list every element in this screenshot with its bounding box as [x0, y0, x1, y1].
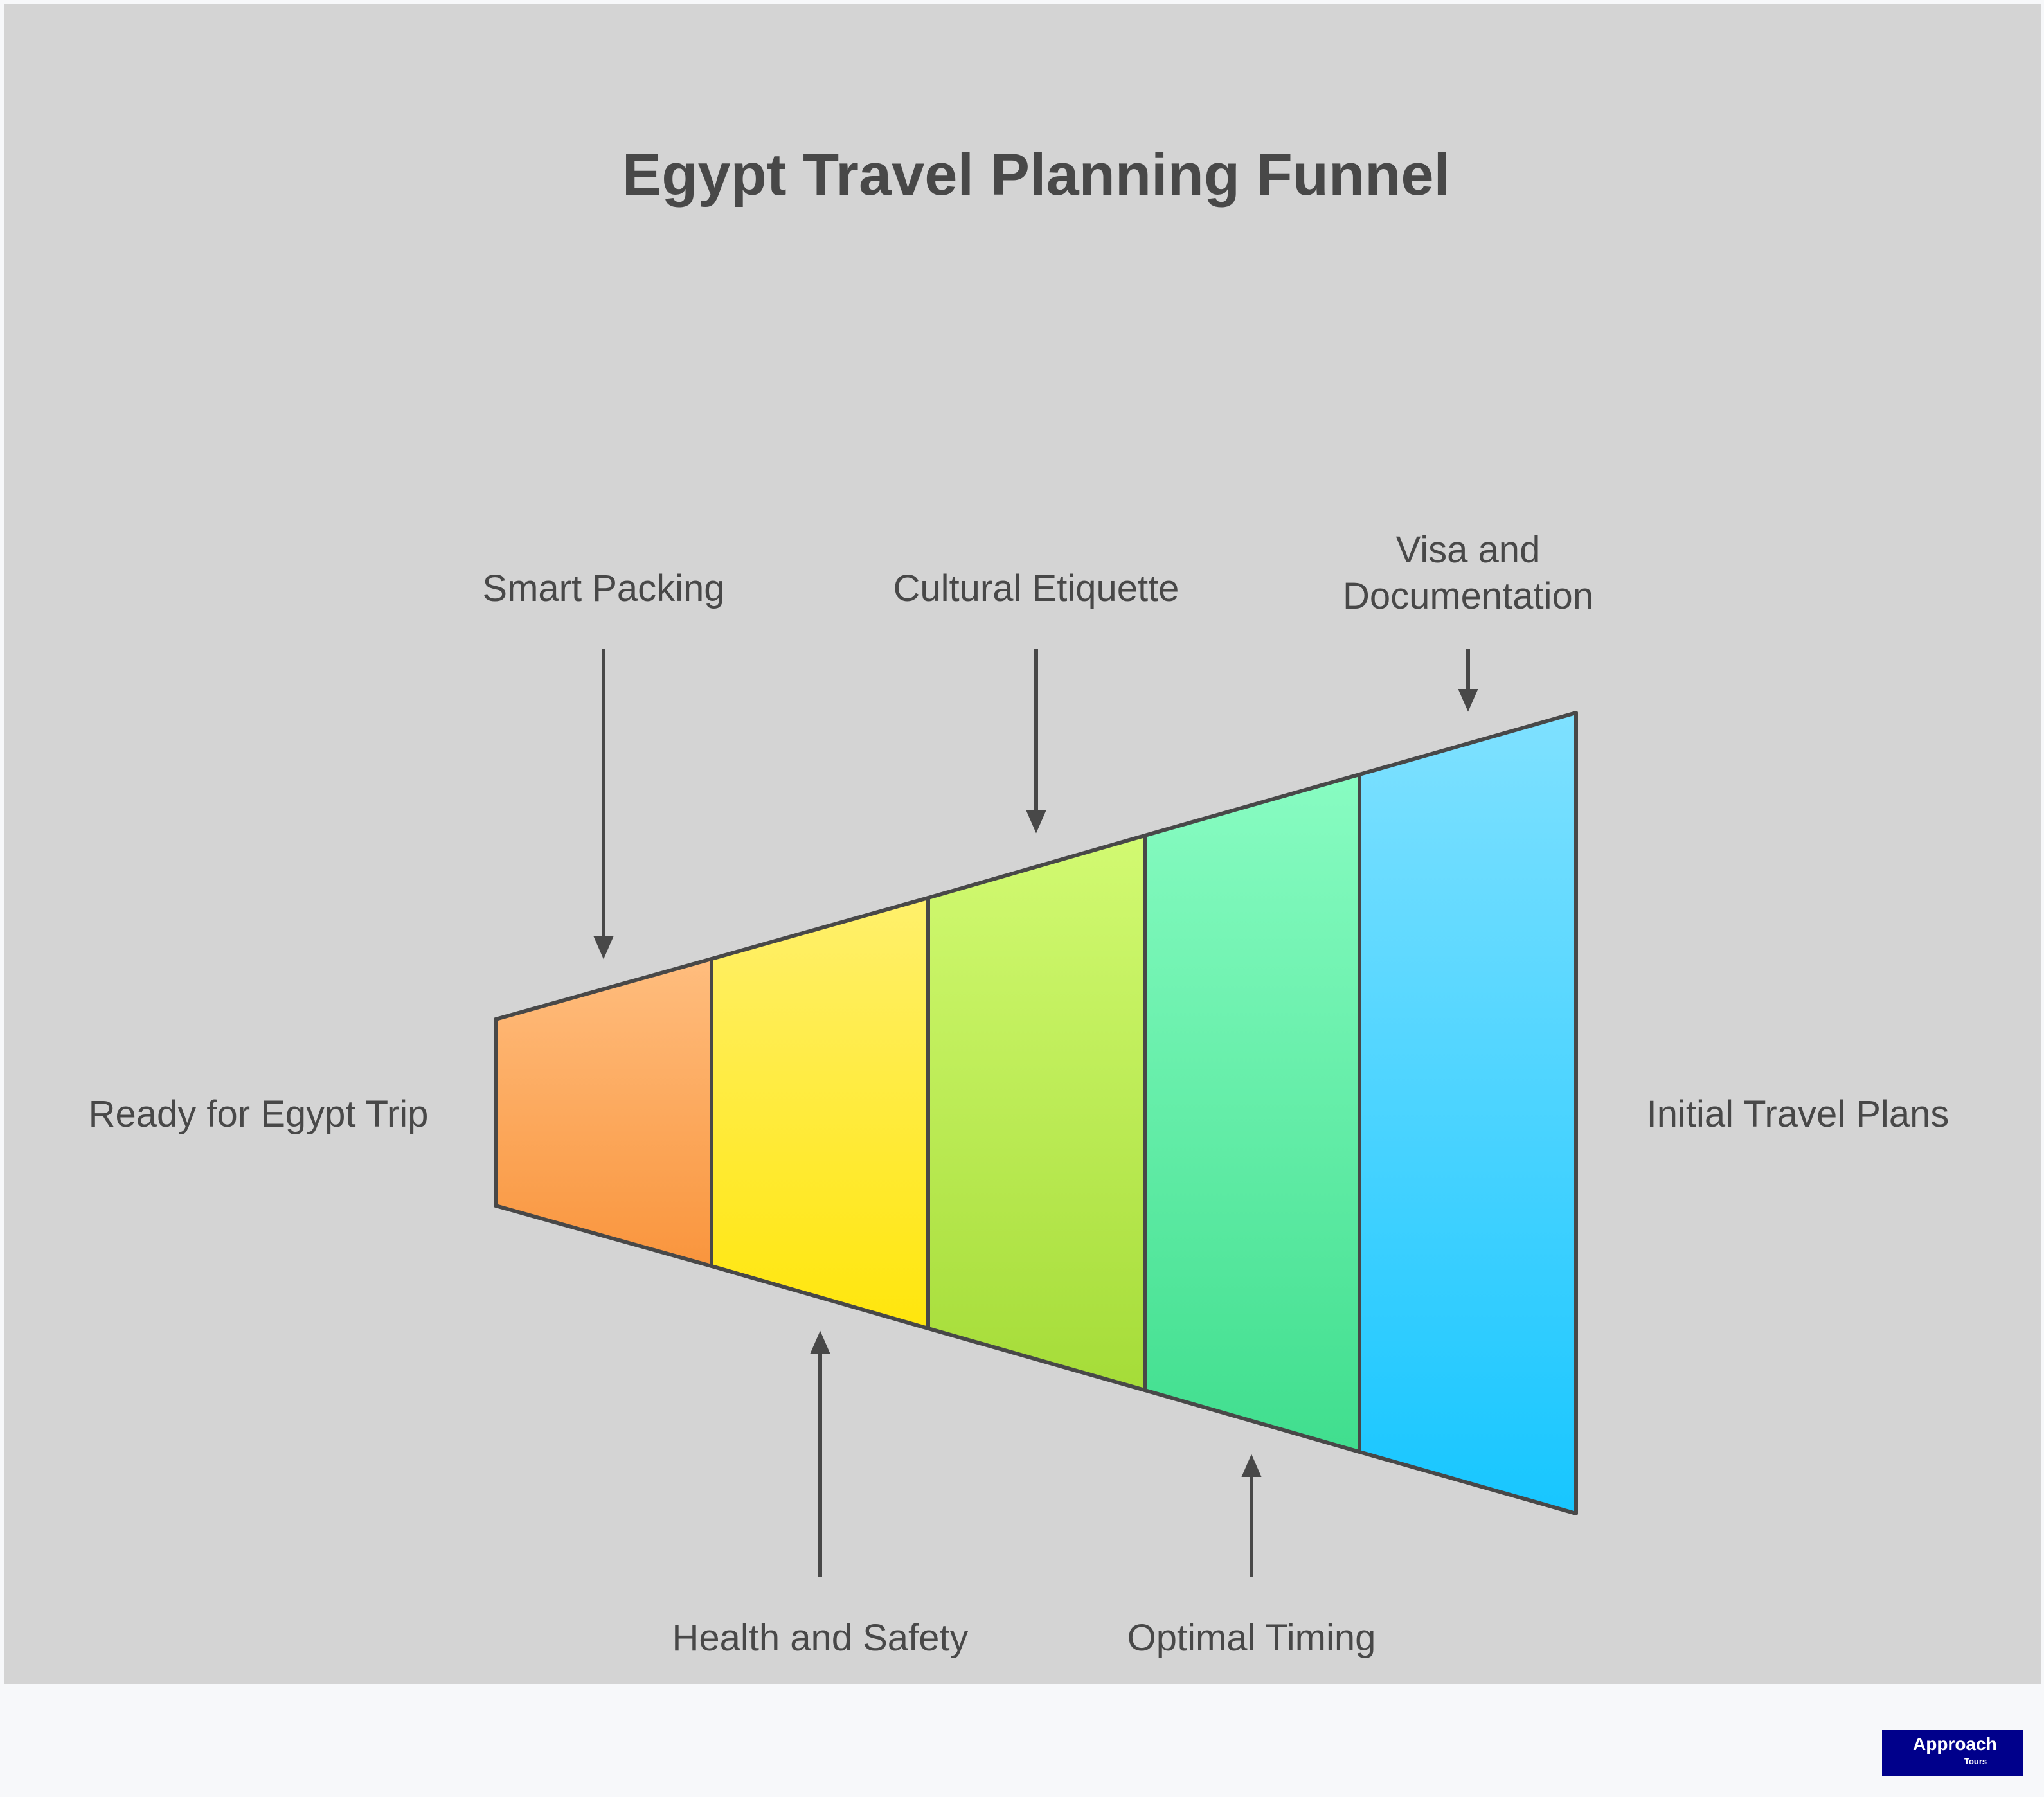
funnel segment: etiquette: [928, 836, 1145, 1390]
label: visa: Visa and: [1396, 529, 1540, 571]
arrow: optimal timing: [1242, 1456, 1260, 1577]
logo: Approach: [1913, 1734, 1997, 1754]
label: cultural etiquette: Cultural Etiquette: [893, 568, 1179, 609]
arrow: cultural etiquette: [1027, 649, 1045, 832]
arrow: health and safety: [811, 1332, 829, 1577]
funnel segment: timing: [1145, 774, 1359, 1452]
label: smart packing: Smart Packing: [482, 568, 725, 609]
label: initial travel plans: Initial Travel Plans: [1647, 1093, 1949, 1135]
label: visa: [1343, 529, 1593, 617]
funnel segment: ready: [496, 959, 712, 1266]
label: visa: Documentation: [1343, 575, 1593, 617]
label: optimal timing: Optimal Timing: [1127, 1617, 1376, 1659]
title: Egypt Travel Planning Funnel: [622, 142, 1450, 208]
funnel segment: packing: [712, 898, 928, 1328]
logo: [1882, 1730, 2023, 1776]
arrow: visa: [1459, 649, 1477, 710]
label: ready for egypt trip: Ready for Egypt Trip: [89, 1093, 428, 1135]
arrow: smart packing: [595, 649, 613, 958]
logo: Tours: [1964, 1757, 1987, 1766]
label: health and safety: Health and Safety: [672, 1617, 969, 1659]
funnel segment: visa: [1359, 713, 1576, 1514]
